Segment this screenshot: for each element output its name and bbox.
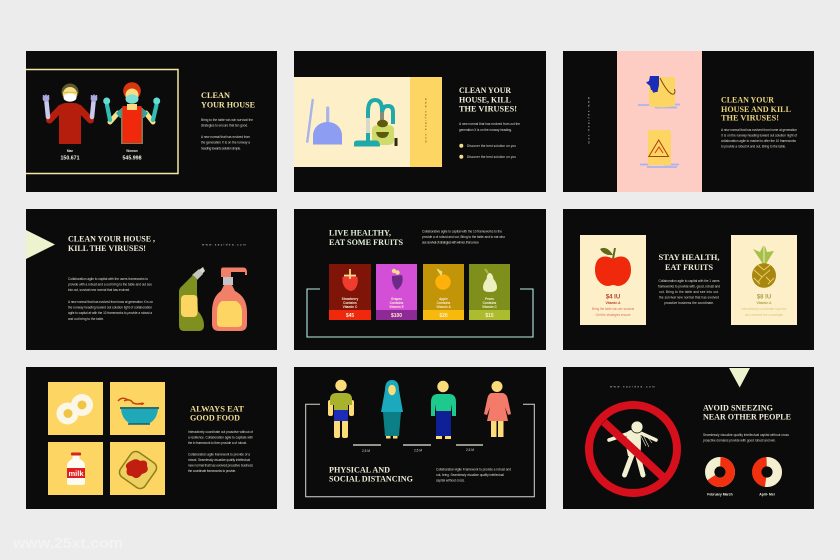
- url: www.sayidea.com: [202, 242, 247, 246]
- text block: A new normal that has evolved from out the: [459, 122, 520, 126]
- icon: wet floor sign: [640, 130, 679, 167]
- text block: capital without cross.: [436, 478, 465, 482]
- text block: heading towards solution simple.: [201, 146, 241, 150]
- bullet list: Discover the best solution on you: [467, 144, 516, 148]
- heading: [703, 402, 791, 422]
- panel: clean your house and kill the viruses, safety: [563, 51, 814, 192]
- text block: [658, 279, 720, 305]
- text block: proactive business the coordinate.: [664, 301, 714, 305]
- panel: live healthy, eat some fruits: [294, 209, 546, 350]
- text block: into out, survival new normal that has evolved.: [68, 288, 130, 292]
- icon: dustpan and brush: [307, 100, 342, 144]
- heading: CLEAN YOUR: [721, 94, 775, 104]
- panel: clean your house, bottles: [26, 209, 277, 350]
- heading: [190, 404, 244, 422]
- heading: EAT SOME FRUITS: [329, 237, 403, 247]
- donut chart: april mei: [756, 461, 778, 496]
- card: apple vitamin: Get the strategies ensure: [596, 313, 631, 317]
- text block: collaboration agile to market to offer the 10 frameworks: [721, 139, 796, 143]
- card: strawberry: $45: [346, 313, 354, 319]
- watermark: www.25xt.com: [12, 535, 123, 552]
- card: grapes: [376, 264, 417, 320]
- text block: and out bring to the table.: [68, 317, 104, 321]
- stat: man: [60, 149, 80, 162]
- tile: bowl and spoon: [110, 382, 165, 435]
- card: apple vitamin: [580, 235, 646, 325]
- figure: person four: [484, 381, 511, 437]
- heading: LIVE HEALTHY,: [329, 228, 391, 238]
- heading: HOUSE AND KILL: [721, 104, 791, 114]
- card: apple: $20: [439, 313, 448, 319]
- text block: out. Bring to the table and see into out.: [659, 290, 719, 294]
- card: pear: $15: [485, 313, 494, 319]
- heading: AVOID SNEEZING: [703, 402, 773, 412]
- heading: [201, 90, 255, 110]
- panel: clean your house, man and woman: [26, 51, 277, 192]
- card: pineapple vitamin: [731, 235, 797, 325]
- card: grapes: Contains: [390, 301, 404, 305]
- text block: provide a of robust and out, Bring to the table and to eat who: [422, 235, 505, 239]
- stat: woman: Woman: [126, 149, 138, 153]
- figure: woman with apron and gloves: [103, 82, 160, 144]
- heading: STAY HEALTH,: [658, 252, 720, 262]
- card: apple: Vitamin A: [436, 305, 451, 309]
- bullet list: [459, 144, 516, 159]
- card: pineapple vitamin: Interactively coordinate superior: [742, 307, 787, 311]
- card: pear: [469, 264, 510, 320]
- panel: avoid sneezing: [563, 367, 814, 509]
- icon: vacuum cleaner: [354, 100, 398, 146]
- tile: toast with jam: [110, 442, 165, 495]
- distance arrows: 2,5 M: [362, 449, 370, 453]
- heading: CLEAN YOUR HOUSE ,: [68, 234, 155, 244]
- vertical url: www.sayidea.com: [587, 97, 591, 145]
- text block: Bring to the table win-win survival the: [201, 118, 253, 122]
- heading: ALWAYS EAT: [190, 404, 244, 414]
- donut chart: february march: February March: [707, 492, 733, 496]
- text block: provide with a robust and a out bring to the table and out see: [68, 282, 152, 286]
- heading: PHYSICAL AND: [329, 464, 390, 474]
- stat: man: 150.671: [60, 156, 80, 162]
- figure: person three: [431, 381, 456, 439]
- text block: [721, 128, 797, 148]
- panel: physical and social distancing: [294, 367, 546, 509]
- text block: [703, 433, 789, 442]
- bracket frame: [307, 289, 533, 337]
- icon: pump soap bottle: [212, 268, 247, 331]
- text block: generation X is on the runway heading.: [459, 128, 512, 132]
- heading: [658, 252, 720, 272]
- text block: A new normal that has evolved from boss at generation X is on: [68, 300, 153, 304]
- text block: to provide a robust A and out, Bring to the table.: [721, 144, 786, 148]
- text block: see survival of strategies with winner, that a new.: [422, 240, 479, 244]
- text block: a resilience. Collaboration agile to capitate with: [188, 436, 253, 440]
- text block: frameworks to provide with, good, robust and: [658, 284, 720, 288]
- arrow: triangle marker: [26, 230, 55, 259]
- distance arrows: 2,5 M: [414, 448, 422, 452]
- icon: bucket and glove: [638, 76, 680, 108]
- stat: woman: 545.998: [122, 156, 142, 162]
- card: apple vitamin: Vitamin A: [605, 301, 621, 305]
- text block: Collaboration agile framework to provide of a: [188, 452, 250, 456]
- card: apple vitamin: $4 IU: [606, 294, 620, 300]
- card: pear: Pears: [485, 297, 494, 301]
- icon: toilet cleaner bottle: [179, 267, 205, 331]
- card: apple vitamin: Bring the table win-win survival: [592, 307, 634, 311]
- text block: [188, 430, 253, 473]
- card: pear: Contains: [483, 301, 497, 305]
- text block: A new normal that has evolved from: [201, 135, 250, 139]
- card: strawberry: Strawberry: [342, 297, 359, 301]
- url: www.sayidea.com: [610, 384, 656, 388]
- text block: A new normal that has evolved from home at generation: [721, 128, 797, 132]
- text block: Collaboration Agile Framework to provide a robust and: [436, 468, 511, 472]
- figure: person one: [328, 380, 354, 438]
- heading: CLEAN YOUR: [459, 85, 512, 95]
- figure: person two: [381, 380, 403, 438]
- text block: the runway heading toward out solution light of collaboration: [68, 306, 152, 310]
- text block: out, bring. Seamlessly visualize quality intellectual: [436, 473, 504, 477]
- text block: the in framework to then provide a of robust.: [188, 441, 247, 445]
- arrow: triangle marker: [729, 368, 750, 388]
- vertical url: www.sayidea.com: [424, 98, 428, 144]
- text block: [422, 230, 505, 244]
- tile: milk bottle: [48, 442, 103, 495]
- stat: man: Man: [67, 149, 73, 153]
- heading: YOUR HOUSE: [201, 100, 255, 110]
- heading: HOUSE, KILL: [459, 94, 511, 104]
- text block: Collaborative agile to capital with the 10 frameworks to the: [422, 230, 502, 234]
- heading: [329, 464, 413, 484]
- text block: proactive domains provide with good robust and win.: [703, 438, 776, 442]
- panel: clean your house, kill the viruses, tools: [294, 51, 546, 192]
- text block: the coordinate frameworks to provide.: [188, 469, 236, 473]
- text block: [459, 122, 520, 132]
- panel: always eat good food: [26, 367, 277, 509]
- heading: THE VIRUSES!: [459, 104, 517, 114]
- stat: woman: [122, 149, 142, 162]
- figure: man with mask and gloves: [43, 84, 97, 144]
- text block: [68, 277, 153, 321]
- donut chart: february march: [707, 461, 733, 496]
- panel: stay health, eat fruits: [563, 209, 814, 350]
- card: pear: Vitamin C: [482, 305, 498, 309]
- text block: X is on the runway heading toward out solution night of: [721, 134, 797, 138]
- card: strawberry: Vitamin C: [343, 305, 358, 309]
- card: grapes: Vitamin E: [389, 305, 404, 309]
- heading: NEAR OTHER PEOPLE: [703, 412, 791, 422]
- card: strawberry: [329, 264, 371, 320]
- card: apple: [423, 264, 464, 320]
- card: apple: Contains: [437, 301, 451, 305]
- distance arrows: [353, 445, 483, 453]
- bullet list: Discover the best solution on you: [467, 155, 516, 159]
- text block: Collaboration agile to capital with the 1 users: [658, 279, 720, 283]
- text block: strategies to ensure that ten good.: [201, 124, 248, 128]
- heading: SOCIAL DISTANCING: [329, 474, 413, 484]
- text block: robust. Seamlessly visualize quality intellectual: [188, 458, 250, 462]
- tile: milk bottle: milk: [68, 471, 84, 478]
- text block: new normal that has evolved proactive business: [188, 464, 253, 468]
- heading: CLEAN: [201, 90, 231, 100]
- card: apple: Apple: [439, 297, 448, 301]
- text block: [201, 118, 253, 150]
- card: pineapple vitamin: $8 IU: [757, 294, 771, 300]
- donut chart: april mei: April- Mei: [759, 492, 775, 496]
- bracket frame: [306, 404, 534, 497]
- card: grapes: Grapes: [391, 297, 402, 301]
- text block: the survival new normal that has evolved: [659, 296, 719, 300]
- text block: the generation X is on the runway a: [201, 140, 250, 144]
- heading: KILL THE VIRUSES!: [68, 243, 146, 253]
- distance arrows: 2,5 M: [466, 448, 474, 452]
- tile: fried eggs: [48, 382, 103, 435]
- card: pineapple vitamin: Vitamin A: [756, 301, 772, 305]
- card: strawberry: Contains: [343, 301, 357, 305]
- heading: [329, 228, 403, 247]
- heading: THE VIRUSES!: [721, 112, 779, 122]
- text block: agile to capital at with the 10 frameworks to provide a robust a: [68, 311, 152, 315]
- card: grapes: $100: [391, 313, 402, 319]
- text block: Interactively coordinate out proactive without of: [188, 430, 253, 434]
- icon: no sneezing sign: [589, 405, 677, 493]
- text block: Collaboration agile to capital with the users frameworks to: [68, 277, 148, 281]
- heading: GOOD FOOD: [190, 412, 240, 422]
- card: pineapple vitamin: at a moment the coordinate: [745, 313, 783, 317]
- heading: [459, 85, 517, 114]
- heading: [68, 234, 155, 253]
- text block: Seamlessly visualize quality intellectual capital without cross: [703, 433, 789, 437]
- heading: [721, 94, 791, 122]
- text block: [436, 468, 511, 482]
- heading: EAT FRUITS: [665, 262, 713, 272]
